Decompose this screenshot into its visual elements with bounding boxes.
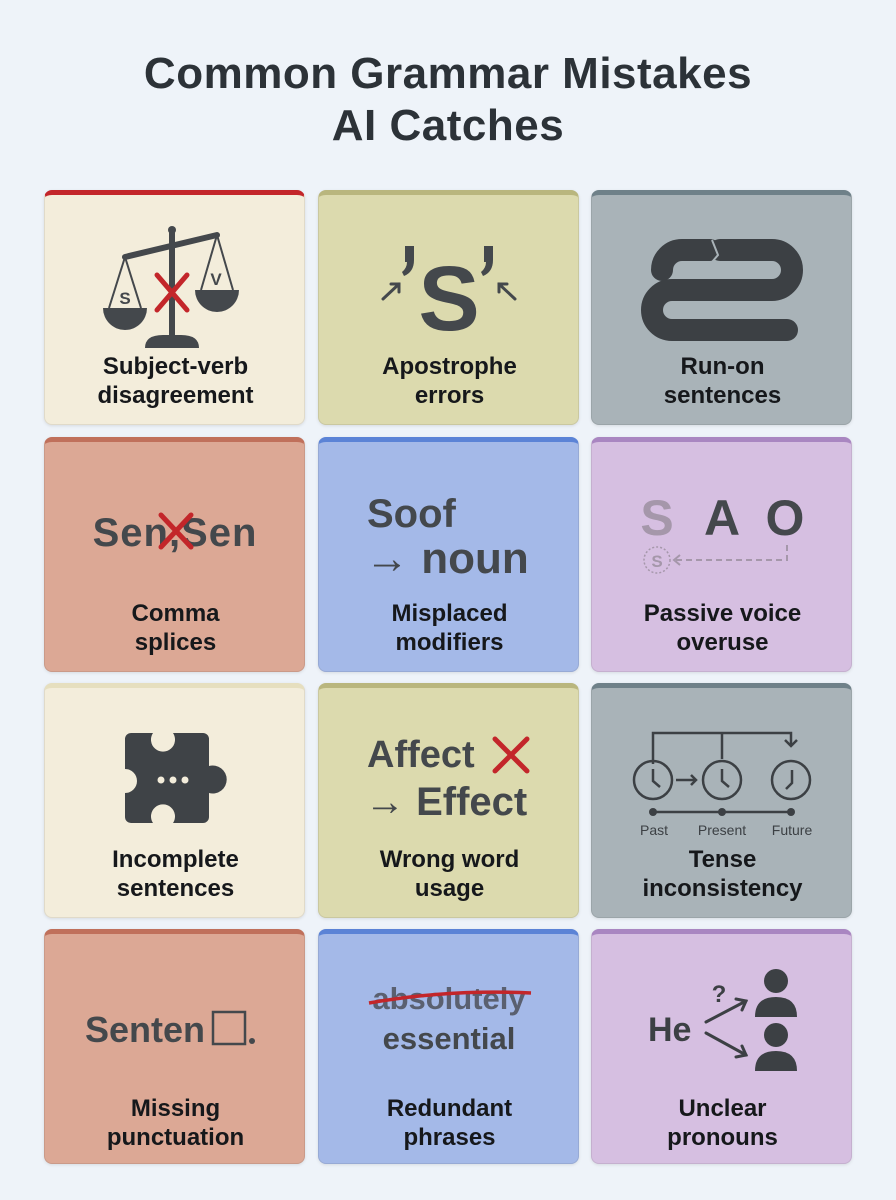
icon: Soof noun: Soof: [367, 492, 457, 536]
label: [382, 353, 517, 409]
icon: clocks timeline: Future: [772, 822, 812, 838]
icon: Affect Effect: Affect: [367, 734, 475, 776]
label: [391, 600, 508, 656]
icon: absolutely essential: essential: [383, 1021, 515, 1056]
icon: He arrows persons: ?: [712, 981, 726, 1008]
icon: scale: [103, 226, 239, 348]
icon: clocks timeline: [632, 732, 812, 838]
panel: run-on sentences: [591, 190, 852, 425]
panel: passive voice overuse: [591, 437, 852, 672]
icon: S A O: S: [640, 490, 674, 546]
label: Missing: [131, 1095, 220, 1122]
panel: tense inconsistency: [591, 683, 852, 918]
icon: apostrophe S: [381, 246, 517, 350]
icon: Affect Effect: [365, 734, 530, 824]
label: [644, 600, 801, 656]
label: Passive voice: [644, 600, 801, 627]
label: Tense: [689, 846, 756, 873]
icon: apostrophe S: S: [418, 248, 480, 350]
icon: run-on snake: [641, 239, 803, 341]
panel: missing punctuation: [44, 929, 305, 1164]
icon: scale: V: [210, 270, 222, 289]
label: [667, 1095, 778, 1151]
label: Redundant: [387, 1095, 512, 1122]
icon: Senten box: Senten: [85, 1009, 205, 1050]
icon: Soof noun: → noun: [365, 534, 529, 583]
panel: subject-verb disagreement: [44, 190, 305, 425]
label: modifiers: [395, 629, 504, 656]
label: splices: [135, 629, 216, 656]
label: Misplaced: [391, 600, 508, 627]
icon: absolutely essential: absolutely: [372, 981, 526, 1016]
panel: misplaced modifiers: [318, 437, 579, 672]
icon: S A O: [640, 490, 804, 574]
icon: scale: S: [119, 289, 131, 308]
label: phrases: [403, 1124, 496, 1151]
label: Incomplete: [112, 846, 239, 873]
label: Unclear: [678, 1095, 767, 1122]
label: sentences: [117, 875, 234, 902]
label: Apostrophe: [382, 353, 517, 380]
icon: puzzle piece: [125, 733, 227, 823]
title: [144, 49, 752, 150]
icon: absolutely essential: [368, 981, 532, 1056]
panel: incomplete sentences: [44, 683, 305, 918]
icon: clocks timeline: Past: [640, 822, 668, 838]
label: [664, 353, 781, 409]
panel: comma splices: [44, 437, 305, 672]
label: [387, 1095, 512, 1151]
title: Common Grammar Mistakes: [144, 49, 752, 98]
label: Run-on: [681, 353, 764, 380]
icon: S A O: A: [704, 490, 740, 546]
label: overuse: [676, 629, 769, 656]
label: sentences: [664, 382, 781, 409]
label: punctuation: [107, 1124, 244, 1151]
label: disagreement: [97, 382, 254, 409]
panel: wrong word usage: [318, 683, 579, 918]
title: AI Catches: [332, 101, 564, 150]
icon: Affect Effect: → Effect: [365, 780, 527, 824]
label: [380, 846, 519, 902]
icon: Sen,Sen: Sen,Sen: [93, 511, 257, 555]
label: Subject-verb: [103, 353, 248, 380]
label: [112, 846, 239, 902]
panel: apostrophe errors: [318, 190, 579, 425]
panel: redundant phrases: [318, 929, 579, 1164]
panel: unclear pronouns: [591, 929, 852, 1164]
label: errors: [415, 382, 484, 409]
icon: Soof noun: [365, 492, 529, 583]
label: usage: [415, 875, 484, 902]
icon: clocks timeline: Present: [698, 822, 746, 838]
label: [97, 353, 254, 409]
label: Comma: [131, 600, 220, 627]
icon: S A O: S: [651, 552, 663, 571]
label: [642, 846, 803, 902]
label: Wrong word: [380, 846, 519, 873]
label: inconsistency: [642, 875, 803, 902]
label: pronouns: [667, 1124, 778, 1151]
label: [107, 1095, 244, 1151]
icon: He arrows persons: He: [648, 1011, 691, 1049]
icon: He arrows persons: [648, 969, 797, 1071]
label: [131, 600, 220, 656]
icon: S A O: O: [766, 490, 804, 546]
